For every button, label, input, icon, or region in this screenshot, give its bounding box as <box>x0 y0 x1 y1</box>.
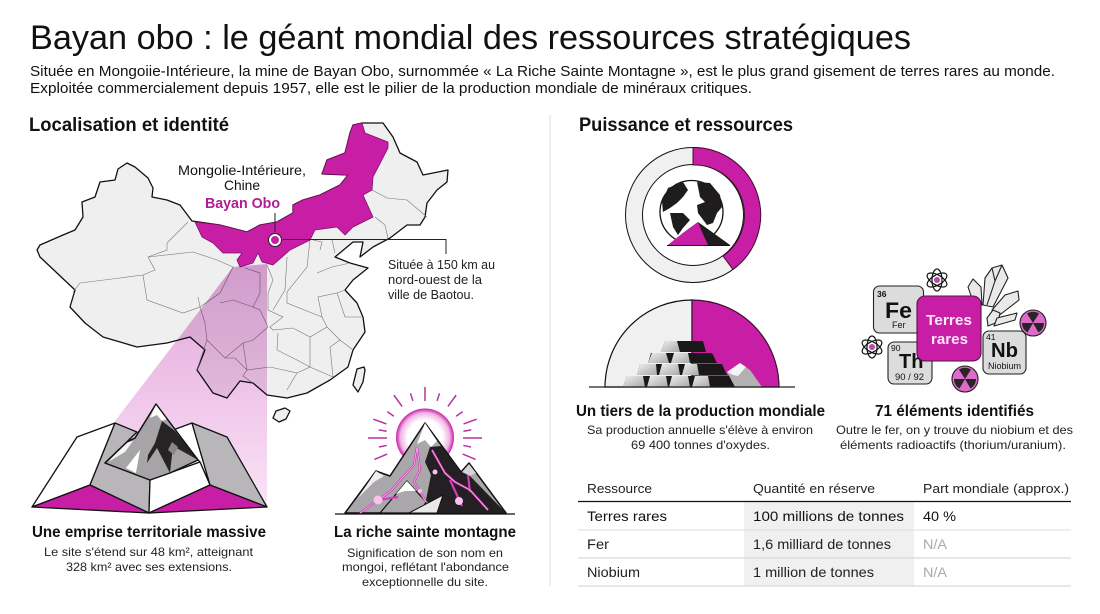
element tile: Th: 90 <box>891 343 901 353</box>
icon: atom top <box>925 269 949 291</box>
element tile: Nb: Niobium <box>988 361 1021 371</box>
element tile: Nb: Nb <box>991 340 1018 362</box>
element tile: Th: 90 / 92 <box>895 372 924 382</box>
icon: atom left <box>860 336 884 358</box>
island: Taiwan <box>353 367 365 392</box>
map label: region: Mongolie-Intérieure, <box>178 162 306 178</box>
element tile: Terres rares <box>917 296 981 361</box>
table: reserves: 40 % <box>923 508 956 524</box>
callout: distance: Située à 150 km au <box>388 258 495 272</box>
projection beam <box>100 264 267 507</box>
table: reserves: 100 millions de tonnes <box>753 508 904 524</box>
icon: folded map with mountain <box>32 404 267 513</box>
caption: production: 69 400 tonnes d'oxydes. <box>631 438 770 452</box>
caption: production: Sa production annuelle s'élève à environ <box>587 423 813 437</box>
intro text: Située en Mongoiie-Intérieure, la mine de Bayan Obo, surnommée « La Riche Sainte Montagne », est le plus grand gisement de terres rares au monde. <box>30 63 1055 80</box>
heading: puissance: Puissance et ressources <box>579 115 793 136</box>
table: reserves: N/A <box>923 536 948 552</box>
table: reserves <box>578 481 1071 586</box>
caption: elements: Outre le fer, on y trouve du niobium et des <box>836 423 1073 437</box>
element tile: Fe: Fe <box>885 298 912 323</box>
chart: donut 40 percent <box>634 147 761 274</box>
caption: montagne: mongoi, reflétant l'abondance <box>342 560 509 574</box>
caption: emprise: Le site s'étend sur 48 km², atteignant <box>44 545 254 559</box>
leader line <box>275 213 446 254</box>
caption: production: Un tiers de la production mondiale <box>576 403 825 420</box>
map label: region: Bayan Obo <box>205 195 280 212</box>
island: Hainan <box>273 408 290 422</box>
panel: puissance et ressources <box>576 115 1073 586</box>
heading: localisation: Localisation et identité <box>29 115 229 136</box>
table: reserves: Quantité en réserve <box>753 481 875 496</box>
caption: montagne: Signification de son nom en <box>347 546 503 560</box>
table: reserves: Niobium <box>587 564 640 580</box>
table: reserves: N/A <box>923 564 948 580</box>
region: Inner Mongolia <box>195 123 388 267</box>
caption: elements: 71 éléments identifiés <box>875 403 1034 420</box>
caption: montagne: La riche sainte montagne <box>334 524 516 541</box>
icon: radiation right <box>1020 310 1046 336</box>
element tile: Th <box>888 342 932 384</box>
intro text: Exploitée commercialement depuis 1957, elle est le pilier de la production mondiale de minéraux critiques. <box>30 80 752 97</box>
title: Bayan obo : le géant mondial des ressources stratégiques <box>30 19 911 57</box>
element tile: Nb <box>983 331 1026 374</box>
chart: half dome <box>605 300 779 387</box>
callout: distance: ville de Baotou. <box>388 288 474 302</box>
table: reserves: Terres rares <box>587 508 667 524</box>
element tile: Fe: Fer <box>892 320 906 330</box>
element tile: Terres rares: rares <box>931 332 968 348</box>
panel: localisation et identité <box>29 115 516 589</box>
map of China <box>37 123 448 422</box>
caption: emprise: Une emprise territoriale massive <box>32 524 266 541</box>
icon: radiation bottom <box>952 366 978 392</box>
caption: montagne: exceptionnelle du site. <box>362 575 488 589</box>
icon: crystals <box>968 265 1019 326</box>
table: reserves: 1,6 milliard de tonnes <box>753 536 891 552</box>
element tile: Fe: 36 <box>877 289 887 299</box>
element tile: Nb: 41 <box>986 332 996 342</box>
table: reserves: Part mondiale (approx.) <box>923 481 1069 496</box>
location marker <box>268 234 282 246</box>
icon: ingot pile <box>589 341 795 387</box>
map label: region <box>178 162 306 212</box>
callout: distance: nord-ouest de la <box>388 273 482 287</box>
icon: sacred mountain <box>335 387 515 514</box>
sun rays <box>368 387 482 459</box>
element tile: Terres rares: Terres <box>926 313 972 329</box>
intro text <box>30 63 1055 97</box>
table: reserves: Fer <box>587 536 609 552</box>
caption: montagne <box>334 524 516 589</box>
map label: region: Chine <box>224 177 260 193</box>
table: reserves: 1 million de tonnes <box>753 564 874 580</box>
element tile: Fe <box>874 286 924 333</box>
caption: emprise: 328 km² avec ses extensions. <box>66 560 232 574</box>
caption: emprise <box>32 524 266 574</box>
caption: elements <box>836 403 1073 452</box>
caption: production <box>576 403 825 452</box>
icon: globe with ore pile <box>660 180 730 246</box>
caption: elements: éléments radioactifs (thorium/uranium). <box>840 438 1066 452</box>
element tile: Th: Th <box>899 351 923 373</box>
table: reserves: Ressource <box>587 481 652 496</box>
callout: distance <box>388 258 495 302</box>
